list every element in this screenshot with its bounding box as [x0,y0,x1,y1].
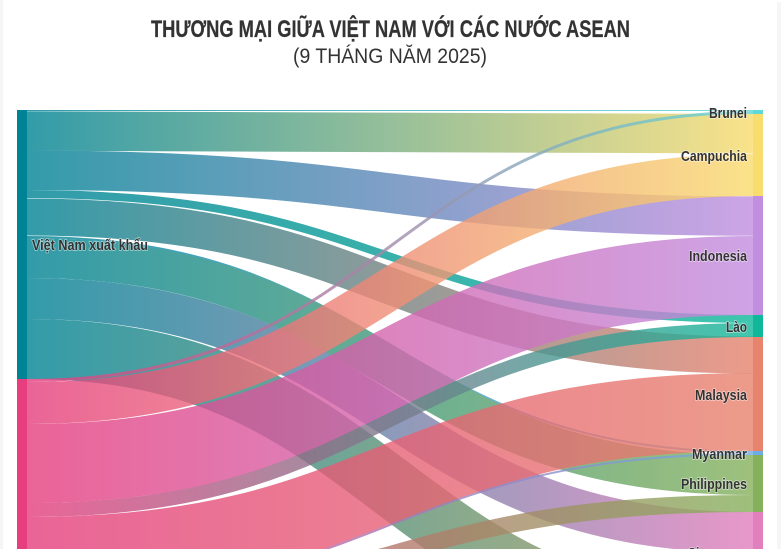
link: import from Brunei [27,112,753,380]
sankey chart [17,105,763,549]
subtitle: (9 THÁNG NĂM 2025) [293,43,487,68]
label: Campuchia: Campuchia [681,148,748,165]
link: import from Campuchia [27,175,753,403]
node: Indonesia [753,196,763,315]
node: Campuchia [753,114,763,196]
node: Singapore [753,512,763,549]
link: export to Indonesia [27,170,753,216]
links: Việt Nam nhập khẩu [27,112,753,549]
link: export to Philippines [27,258,753,475]
title: THƯƠNG MẠI GIỮA VIỆT NAM VỚI CÁC NƯỚC ASEAN [151,15,630,43]
node: Malaysia [753,337,763,451]
links: Việt Nam xuất khẩu [27,110,753,549]
label: Malaysia: Malaysia [695,387,748,404]
node: Philippines [753,455,763,512]
link: import from Lào [27,330,753,510]
link: export to Campuchia [27,131,753,134]
label: Indonesia: Indonesia [689,248,748,265]
link: import from Philippines [27,504,753,549]
link: import from Malaysia [27,412,753,549]
link: import from Myanmar [27,454,753,549]
link: export to Myanmar [27,237,753,452]
node: Việt Nam nhập khẩu [17,379,27,549]
label: Philippines: Philippines [681,476,747,493]
label: Lào: Lào [726,319,747,336]
link: export to Malaysia [27,217,753,355]
label: Việt Nam xuất khẩu: Việt Nam xuất khẩu [32,237,148,254]
link: export to Thái Lan [27,349,753,549]
node: Brunei [753,110,763,114]
link: export to Lào [27,194,753,319]
link: import from Indonesia [27,276,753,464]
node: Lào [753,315,763,337]
label: Brunei: Brunei [709,105,747,122]
node: Myanmar [753,451,763,455]
link: export to Brunei [27,110,753,112]
link: export to Singapore [27,298,753,532]
label: Myanmar: Myanmar [692,446,747,463]
node: Việt Nam xuất khẩu [17,110,27,379]
